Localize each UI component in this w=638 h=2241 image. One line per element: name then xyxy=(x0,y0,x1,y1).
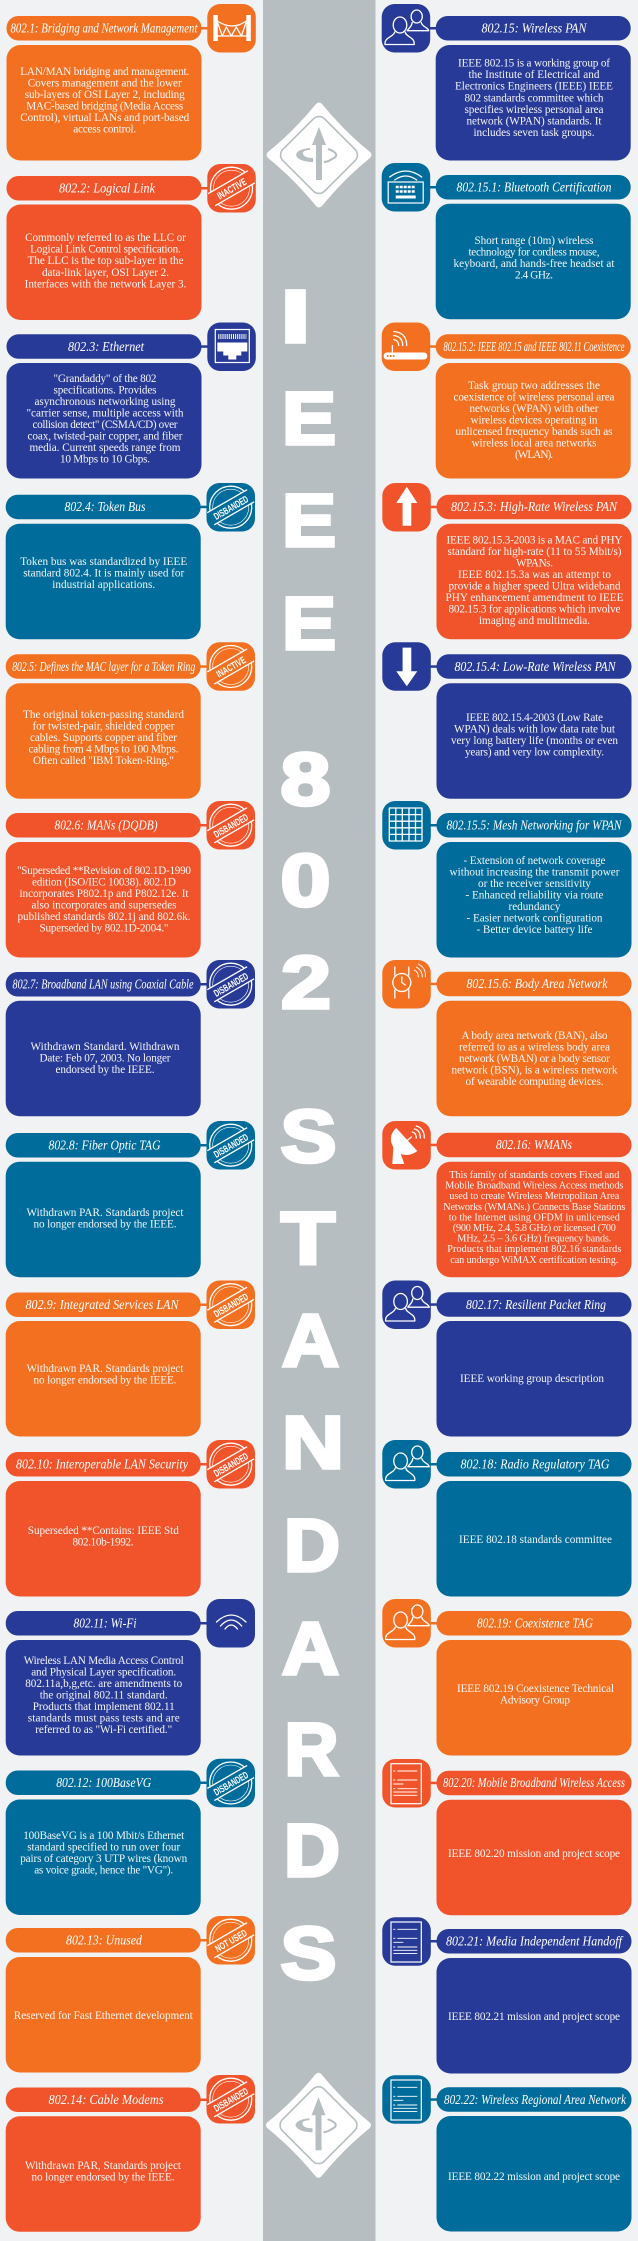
panel: 802.5 xyxy=(6,642,255,799)
text block: as voice grade, hence the "VG"). xyxy=(34,1864,173,1876)
text block: access control. xyxy=(73,124,136,136)
heading: 802.11: 802.11: Wi-Fi xyxy=(74,1616,137,1632)
heading: 802.14 xyxy=(6,2088,207,2112)
heading: 802.9: 802.9: Integrated Services LAN xyxy=(26,1298,179,1313)
title: vertical letters IEEE 802 STANDARDS: D xyxy=(284,1809,340,1892)
text block: "carrier sense, multiple access with xyxy=(26,407,184,419)
text block: coax, twisted-pair copper, and fiber xyxy=(28,430,183,442)
text block: (900 MHz, 2.4, 5.8 GHz) or licensed (700 xyxy=(453,1223,616,1234)
text block: used to create Wireless Metropolitan Area xyxy=(449,1191,620,1202)
text block xyxy=(6,45,202,160)
icon: disbanded stamp xyxy=(206,483,255,532)
text block: standard for high-rate (11 to 55 Mbit/s) xyxy=(448,546,622,558)
panel: 802.12 xyxy=(6,1759,255,1915)
text block: coexistence of wireless personal area xyxy=(454,392,615,404)
text block: "Grandaddy" of the 802 xyxy=(54,373,156,385)
icon: disbanded stamp xyxy=(206,2075,255,2124)
heading: 802.18 xyxy=(430,1452,632,1476)
heading: 802.6: 802.6: MANs (DQDB) xyxy=(54,818,158,834)
icon: disbanded stamp: DISBANDED xyxy=(212,1451,251,1480)
icon: disbanded stamp: DISBANDED xyxy=(212,812,251,841)
heading: 802.14: 802.14: Cable Modems xyxy=(48,2093,164,2108)
text block xyxy=(6,1162,201,1277)
text block xyxy=(6,1321,201,1436)
text block: Withdrawn PAR, Standards project xyxy=(25,2160,182,2172)
text block: - Better device battery life xyxy=(476,924,593,936)
panel: 802.8 xyxy=(6,1121,255,1277)
heading: 802.20 xyxy=(430,1771,632,1795)
title: vertical letters IEEE 802 STANDARDS: E xyxy=(282,582,336,665)
text block: standard specified to run over four xyxy=(27,1842,180,1854)
heading: 802.15.6 xyxy=(430,972,632,996)
text block: 802.11a,b,g,etc. are amendments to xyxy=(25,1678,183,1690)
icon: document xyxy=(382,1917,431,1966)
text block: and Physical Layer specification. xyxy=(31,1666,176,1678)
heading: 802.12 xyxy=(6,1770,207,1795)
text block: Superseded **Contains: IEEE Std xyxy=(28,1525,179,1537)
text block: provide a higher speed Ultra wideband xyxy=(448,581,621,593)
text block: standard 802.4. It is mainly used for xyxy=(23,568,184,580)
heading: 802.15.3 xyxy=(430,495,632,519)
title: vertical letters IEEE 802 STANDARDS: E xyxy=(282,377,336,460)
text block: technology for cordless mouse, xyxy=(468,246,600,258)
text block: 802.10b-1992. xyxy=(72,1536,134,1548)
text block: no longer endorsed by the IEEE. xyxy=(34,1374,177,1386)
heading: 802.15: 802.15: Wireless PAN xyxy=(482,22,587,36)
text block xyxy=(436,363,631,478)
text block xyxy=(6,1800,201,1915)
heading: 802.3 xyxy=(6,334,208,359)
text block: to the Internet using OFDM in unlicensed xyxy=(449,1212,620,1223)
heading: 802.5 xyxy=(6,654,207,679)
icon: disbanded stamp: DISBANDED xyxy=(212,1132,251,1161)
text block xyxy=(6,842,201,958)
text block: WPAN) deals with low data rate but xyxy=(454,724,616,736)
text block: network (WPAN) standards. It xyxy=(466,115,602,127)
icon: wi-fi xyxy=(206,1599,255,1648)
icon: bridge xyxy=(207,4,256,52)
text block: Electronics Engineers (IEEE) IEEE xyxy=(455,81,613,93)
text block: very long battery life (months or even xyxy=(451,735,618,747)
text block: Task group two addresses the xyxy=(468,380,600,392)
text block: IEEE 802.15 is a working group of xyxy=(458,58,610,70)
text block: network (BSN), is a wireless network xyxy=(452,1064,618,1076)
heading: 802.1 xyxy=(6,16,208,40)
heading: 802.7: 802.7: Broadband LAN using Coaxial Cable xyxy=(12,978,194,992)
text block: IEEE 802.22 mission and project scope xyxy=(448,2171,620,2183)
text block xyxy=(6,1957,201,2072)
title: vertical letters IEEE 802 STANDARDS: 2 xyxy=(281,941,331,1024)
icon: inactive stamp xyxy=(207,164,256,212)
text block: Withdrawn PAR. Standards project xyxy=(26,1207,184,1219)
icon: inactive stamp: INACTIVE xyxy=(215,655,248,681)
title: vertical letters IEEE 802 STANDARDS: 8 xyxy=(280,738,330,821)
icon: disbanded stamp xyxy=(206,1280,255,1329)
text block xyxy=(436,683,632,799)
icon: disbanded stamp: DISBANDED xyxy=(212,1770,251,1799)
heading: 802.2 xyxy=(6,176,208,200)
text block: can undergo WiMAX certification testing. xyxy=(450,1255,618,1266)
heading: 802.6 xyxy=(6,813,207,838)
panel: 802.15.3 xyxy=(382,483,632,639)
panel: 802.15 xyxy=(382,4,631,160)
icon: not used stamp: NOT USED xyxy=(214,1928,249,1955)
logo: IEEE diamond top xyxy=(266,102,372,208)
icon: satellite dish xyxy=(382,1121,431,1170)
heading: 802.4 xyxy=(6,495,207,519)
text block: endorsed by the IEEE. xyxy=(56,1064,155,1076)
text block: Logical Link Control specification. xyxy=(30,244,181,256)
text block: Often called "IBM Token-Ring." xyxy=(33,755,174,767)
text block: Withdrawn PAR. Standards project xyxy=(26,1363,184,1375)
panel: 802.15.5 xyxy=(382,801,632,958)
text block: Mobile Broadband Wireless Access methods xyxy=(445,1181,623,1192)
heading: 802.8 xyxy=(6,1133,207,1158)
heading: 802.11 xyxy=(6,1611,207,1636)
text block xyxy=(436,1001,632,1116)
heading: 802.17 xyxy=(430,1292,632,1317)
panel: 802.7 xyxy=(6,960,255,1116)
panel: 802.11 xyxy=(6,1599,255,1756)
text block: 2.4 GHz. xyxy=(515,270,553,282)
text block: Advisory Group xyxy=(500,1694,570,1706)
text block: IEEE 802.15.3a was an attempt to xyxy=(458,569,611,581)
text block: media. Current speeds range from xyxy=(30,442,181,454)
text block: wireless devices operating in xyxy=(470,414,598,426)
panel: 802.16 xyxy=(382,1121,632,1277)
text block: asynchronous networking using xyxy=(34,396,176,408)
text block: Control), virtual LANs and port-based xyxy=(20,112,190,124)
text block: IEEE 802.15.4-2003 (Low Rate xyxy=(466,712,603,724)
panel: 802.15.2 xyxy=(382,322,631,478)
icon: document xyxy=(382,2075,431,2124)
text block xyxy=(436,1800,632,1915)
text block xyxy=(6,1640,201,1756)
text block: A body area network (BAN), also xyxy=(462,1030,608,1042)
panel: 802.13 xyxy=(6,1916,255,2072)
icon: disbanded stamp: DISBANDED xyxy=(212,971,251,1000)
text block: years) and very low complexity. xyxy=(465,747,604,759)
text block xyxy=(6,2116,201,2232)
title: vertical letters IEEE 802 STANDARDS: A xyxy=(282,1607,339,1690)
text block: Commonly referred to as the LLC or xyxy=(25,232,186,244)
text block: IEEE working group description xyxy=(460,1373,604,1385)
icon: disbanded stamp: DISBANDED xyxy=(212,1292,251,1320)
icon: disbanded stamp xyxy=(206,960,255,1008)
text block xyxy=(436,204,631,319)
text block: redundancy xyxy=(508,901,561,913)
title: vertical letters IEEE 802 STANDARDS: A xyxy=(282,1299,339,1382)
text block xyxy=(6,1481,201,1596)
title: vertical letters IEEE 802 STANDARDS: 0 xyxy=(280,839,330,922)
text block: Token bus was standardized by IEEE xyxy=(20,556,187,568)
heading: 802.7 xyxy=(6,972,207,996)
panel: 802.1 xyxy=(6,4,256,160)
text block: keyboard, and hands-free headset at xyxy=(454,258,615,270)
text block xyxy=(6,204,202,320)
text block: Superseded by 802.1D-2004." xyxy=(40,923,168,935)
text block: 100BaseVG is a 100 Mbit/s Ethernet xyxy=(23,1830,185,1842)
text block: sub-layers of OSI Layer 2, including xyxy=(25,89,185,101)
icon: inactive stamp xyxy=(206,642,255,691)
text block: or the receiver sensitivity xyxy=(478,878,591,890)
panel: 802.15.6 xyxy=(382,960,632,1116)
text block: for twisted-pair, shielded copper xyxy=(32,720,175,732)
heading: 802.15.2 xyxy=(429,334,631,359)
icon: people xyxy=(382,1440,431,1488)
panel: 802.21 xyxy=(382,1917,632,2074)
icon: smart watch xyxy=(382,960,431,1008)
icon: disbanded stamp xyxy=(206,1759,255,1807)
heading: 802.15.1: 802.15.1: Bluetooth Certification xyxy=(456,180,612,196)
text block: referred to as "Wi-Fi certified." xyxy=(35,1724,172,1736)
panel: 802.3 xyxy=(6,322,256,478)
text block xyxy=(436,1321,632,1436)
panel: 802.10 xyxy=(6,1440,255,1596)
text block xyxy=(436,842,632,958)
panel: 802.17 xyxy=(382,1280,632,1436)
panel: 802.15.1 xyxy=(382,163,631,319)
text block: data-link layer, OSI Layer 2. xyxy=(42,267,169,279)
text block: IEEE 802.20 mission and project scope xyxy=(448,1848,620,1860)
text block: Networks (WMANs.) Connects Base Stations xyxy=(443,1202,625,1213)
heading: 802.8: 802.8: Fiber Optic TAG xyxy=(48,1138,160,1154)
panel: 802.22 xyxy=(382,2075,632,2232)
heading: 802.15.6: 802.15.6: Body Area Network xyxy=(466,977,608,992)
icon: people xyxy=(382,1280,431,1329)
heading: 802.12: 802.12: 100BaseVG xyxy=(56,1776,151,1791)
text block xyxy=(436,2116,632,2232)
heading: 802.21 xyxy=(430,1929,632,1954)
text block: This family of standards covers Fixed and xyxy=(449,1170,619,1181)
text block: specifies wireless personal area xyxy=(464,104,604,116)
heading: 802.13: 802.13: Unused xyxy=(66,1934,143,1948)
text block: (WLAN). xyxy=(515,449,553,461)
heading: 802.15.4 xyxy=(430,654,632,679)
text block: specifications. Provides xyxy=(54,384,156,396)
heading: 802.3: 802.3: Ethernet xyxy=(68,340,145,355)
text block: imaging and multimedia. xyxy=(479,615,590,627)
icon: down arrow xyxy=(382,642,431,691)
text block: Reserved for Fast Ethernet development xyxy=(14,2010,194,2022)
text block: - Extension of network coverage xyxy=(464,855,606,867)
icon: document xyxy=(382,1759,431,1808)
heading: 802.1: 802.1: Bridging and Network Management xyxy=(10,22,198,36)
text block: wireless local area networks xyxy=(472,438,596,450)
title: vertical letters IEEE 802 STANDARDS: N xyxy=(282,1401,344,1484)
text block: IEEE 802.21 mission and project scope xyxy=(448,2011,620,2023)
text block: Products that implement 802.11 xyxy=(33,1701,175,1713)
text block: published standards 802.1j and 802.6k. xyxy=(18,911,191,923)
heading: 802.5: 802.5: Defines the MAC layer for a Token Ring xyxy=(12,660,195,675)
heading: 802.2: 802.2: Logical Link xyxy=(59,182,156,196)
text block: Withdrawn Standard. Withdrawn xyxy=(30,1041,180,1053)
text block: Products that implement 802.16 standards xyxy=(447,1244,621,1255)
text block: - Enhanced reliability via route xyxy=(466,890,604,902)
heading: 802.10 xyxy=(6,1452,207,1476)
title: vertical letters IEEE 802 STANDARDS: I xyxy=(280,275,310,358)
text block: pairs of category 3 UTP wires (known xyxy=(20,1853,188,1865)
title: vertical letters IEEE 802 STANDARDS: S xyxy=(280,1912,336,1995)
text block: no longer endorsed by the IEEE. xyxy=(32,2172,175,2184)
text block: networks (WPAN) with other xyxy=(470,403,599,415)
icon: disbanded stamp: DISBANDED xyxy=(212,2086,251,2115)
icon: ethernet port xyxy=(207,322,256,371)
panel: 802.15.4 xyxy=(382,642,632,799)
panel: 802.18 xyxy=(382,1440,632,1596)
text block: referred to as a wireless body area xyxy=(459,1042,610,1054)
text block: cables. Supports copper and fiber xyxy=(30,732,177,744)
text block: 802.15.3 for applications which involve xyxy=(448,604,621,616)
icon: inactive stamp: INACTIVE xyxy=(216,177,249,202)
text block: network (WBAN) or a body sensor xyxy=(459,1053,610,1065)
text block xyxy=(436,45,631,160)
heading: 802.13 xyxy=(6,1928,207,1952)
text block: Interfaces with the network Layer 3. xyxy=(25,278,187,290)
icon: not used stamp xyxy=(206,1916,255,1964)
icon: disbanded stamp xyxy=(206,801,255,850)
text block: The original token-passing standard xyxy=(23,709,184,721)
text block: 10 Mbps to 10 Gbps. xyxy=(60,453,150,465)
text block: without increasing the transmit power xyxy=(450,866,620,878)
text block: IEEE 802.18 standards committee xyxy=(459,1534,612,1546)
text block xyxy=(6,1001,201,1116)
text block: also incorporates and supersedes xyxy=(32,900,176,912)
heading: 802.15.5 xyxy=(430,813,632,838)
text block: 802 standards committee which xyxy=(464,92,604,104)
text block: Wireless LAN Media Access Control xyxy=(24,1655,184,1667)
title: vertical letters IEEE 802 STANDARDS xyxy=(280,275,344,1995)
title: vertical letters IEEE 802 STANDARDS: S xyxy=(280,1095,336,1178)
icon: people xyxy=(382,4,430,52)
panel: 802.20 xyxy=(382,1759,632,1915)
panel: 802.6 xyxy=(6,801,255,958)
heading: 802.15.1 xyxy=(429,175,631,200)
icon: wireless keyboard xyxy=(382,163,430,212)
panel: 802.19 xyxy=(382,1599,632,1756)
heading: 802.15 xyxy=(429,16,631,40)
heading: 802.4: 802.4: Token Bus xyxy=(64,500,146,515)
text block xyxy=(436,524,632,639)
text block: IEEE 802.19 Coexistence Technical xyxy=(457,1683,614,1695)
text block: collision detect" (CSMA/CD) over xyxy=(32,419,178,431)
text block: edition (ISO/IEC 10038). 802.1D xyxy=(32,876,176,888)
icon: disbanded stamp xyxy=(206,1440,255,1488)
text block: "Superseded **Revision of 802.1D-1990 xyxy=(17,865,191,877)
text block: Short range (10m) wireless xyxy=(474,235,594,247)
text block: no longer endorsed by the IEEE. xyxy=(34,1218,177,1230)
panel: 802.4 xyxy=(6,483,255,639)
heading: 802.16 xyxy=(430,1133,632,1157)
text block: IEEE 802.15.3-2003 is a MAC and PHY xyxy=(446,535,622,547)
text block: unlicensed frequency bands such as xyxy=(456,426,612,438)
title: vertical letters IEEE 802 STANDARDS: T xyxy=(281,1197,335,1280)
text block: LAN/MAN bridging and management. xyxy=(20,66,189,78)
icon: mesh grid xyxy=(382,801,431,850)
text block: The LLC is the top sub-layer in the xyxy=(28,255,184,267)
text block xyxy=(6,683,201,799)
text block: the Institute of Electrical and xyxy=(468,69,600,81)
text block: - Easier network configuration xyxy=(466,912,603,924)
text block: PHY enhancement amendment to IEEE xyxy=(446,592,624,604)
text block: includes seven task groups. xyxy=(474,127,595,139)
text block xyxy=(436,1162,632,1277)
text block: cabling from 4 Mbps to 100 Mbps. xyxy=(28,744,179,756)
text block: WPANs. xyxy=(516,558,553,570)
text block: Date: Feb 07, 2003. No longer xyxy=(40,1052,171,1064)
text block: of wearable computing devices. xyxy=(466,1076,604,1088)
icon: disbanded stamp xyxy=(206,1121,255,1170)
icon: wireless router xyxy=(382,322,430,371)
central grey band xyxy=(263,0,376,2241)
heading: 802.19 xyxy=(430,1611,632,1636)
icon: people xyxy=(382,1599,431,1648)
heading: 802.18: 802.18: Radio Regulatory TAG xyxy=(460,1458,610,1472)
text block: MHz, 2.5 – 3.6 GHz) frequency bands. xyxy=(457,1234,611,1245)
icon: disbanded stamp: DISBANDED xyxy=(212,494,251,523)
heading: 802.10: 802.10: Interoperable LAN Security xyxy=(16,1458,189,1472)
heading: 802.19: 802.19: Coexistence TAG xyxy=(477,1616,593,1632)
panel: 802.2 xyxy=(6,164,256,320)
text block xyxy=(436,1640,632,1756)
title: vertical letters IEEE 802 STANDARDS: R xyxy=(284,1708,338,1791)
text block xyxy=(6,363,202,478)
heading: 802.9 xyxy=(6,1292,207,1317)
text block: MAC-based bridging (Media Access xyxy=(26,101,183,113)
logo: IEEE diamond bottom xyxy=(266,2073,371,2178)
text block: standards must pass tests and are xyxy=(28,1713,180,1725)
text block xyxy=(436,1958,632,2074)
panel: 802.9 xyxy=(6,1280,255,1436)
title: vertical letters IEEE 802 STANDARDS: D xyxy=(284,1504,340,1587)
panel: 802.14 xyxy=(6,2075,255,2232)
heading: 802.22 xyxy=(430,2087,632,2112)
text block xyxy=(436,1481,632,1596)
heading: 802.17: 802.17: Resilient Packet Ring xyxy=(466,1298,606,1313)
icon: up arrow xyxy=(382,483,431,532)
text block: incorporates P802.1p and P802.12e. It xyxy=(20,888,189,900)
text block: the original 802.11 standard. xyxy=(40,1690,168,1702)
title: vertical letters IEEE 802 STANDARDS: E xyxy=(282,479,336,562)
text block xyxy=(6,524,201,639)
text block: Covers management and the lower xyxy=(28,78,182,90)
text block: industrial applications. xyxy=(52,579,155,591)
heading: 802.16: 802.16: WMANs xyxy=(496,1138,572,1153)
